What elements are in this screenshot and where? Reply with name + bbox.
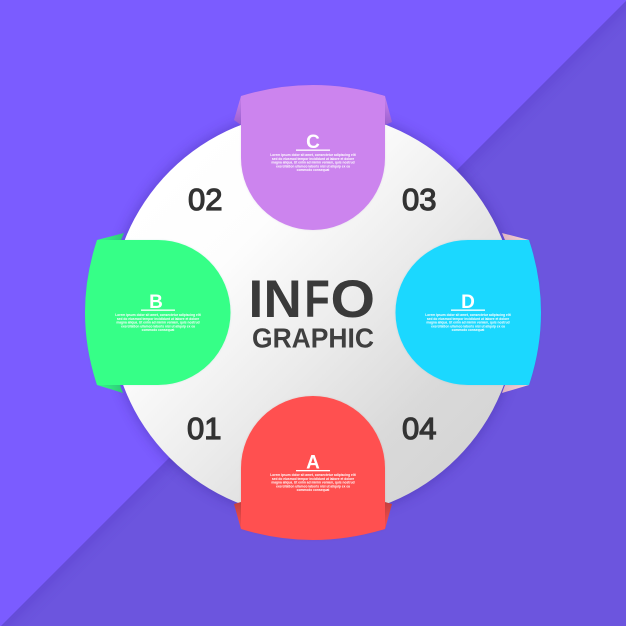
panel: D: magna aliqua. Ut enim ad minim veniam, quis nostrud: [426, 320, 510, 324]
panel: C: Lorem ipsum dolor sit amet, consectetur adipiscing elit: [270, 153, 357, 157]
panel: A: [234, 396, 392, 540]
panel: B: Lorem ipsum dolor sit amet, consectetur adipiscing elit: [115, 313, 202, 317]
panel: C: magna aliqua. Ut enim ad minim veniam, quis nostrud: [271, 161, 355, 165]
panel: C: commodo consequat: [297, 168, 330, 172]
panel: D: sed do eiusmod tempor incididunt ut labore et dolore: [427, 317, 509, 321]
panel: A: A: [306, 452, 320, 474]
panel: B: magna aliqua. Ut enim ad minim veniam, quis nostrud: [116, 320, 200, 324]
panel: D: exercitation ullamco laboris nisi ut aliquip ex ea: [431, 324, 505, 328]
title: O: [330, 269, 375, 329]
title: N: [264, 270, 302, 329]
panel: B: sed do eiusmod tempor incididunt ut labore et dolore: [117, 317, 199, 321]
panel: D: Lorem ipsum dolor sit amet, consectetur adipiscing elit: [425, 313, 512, 317]
number 01: 01: [187, 411, 221, 446]
panel: A: exercitation ullamco laboris nisi ut aliquip ex ea: [276, 484, 350, 488]
panel: D: D: [461, 292, 475, 313]
panel: B: exercitation ullamco laboris nisi ut aliquip ex ea: [121, 324, 195, 328]
number 03: 03: [402, 182, 436, 217]
panel: D: commodo consequat: [452, 328, 485, 332]
central disc: [108, 110, 518, 520]
panel: C: sed do eiusmod tempor incididunt ut labore et dolore: [272, 157, 354, 161]
panel: C: C: [306, 132, 320, 153]
panel: A: magna aliqua. Ut enim ad minim veniam, quis nostrud: [271, 481, 355, 485]
panel: B: [85, 233, 230, 393]
panel: A: sed do eiusmod tempor incididunt ut labore et dolore: [272, 477, 354, 481]
title: [248, 269, 375, 354]
panel: A: commodo consequat: [297, 488, 330, 492]
panel: B: B: [149, 292, 163, 313]
number 04: 04: [402, 411, 436, 446]
title: I: [248, 270, 263, 329]
panel: C: [234, 85, 392, 230]
panel: C: exercitation ullamco laboris nisi ut aliquip ex ea: [276, 164, 350, 168]
panel: D: [396, 233, 541, 393]
title: GRAPHIC: [252, 322, 374, 354]
panel: B: commodo consequat: [142, 328, 175, 332]
panel: A: Lorem ipsum dolor sit amet, consectetur adipiscing elit: [270, 473, 357, 477]
number 02: 02: [188, 182, 222, 217]
title: F: [304, 270, 330, 329]
